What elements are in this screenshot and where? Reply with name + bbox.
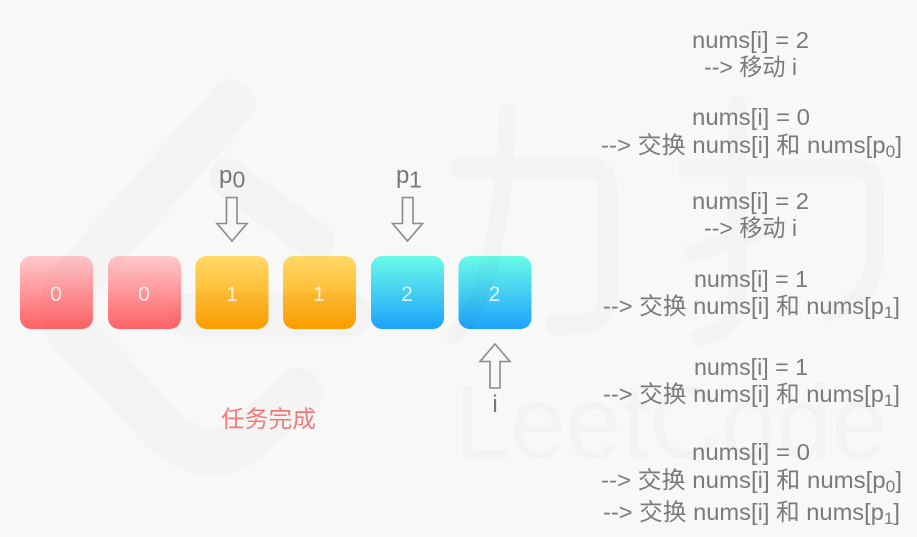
cell 4 [371, 256, 444, 329]
cell 4: 2 [401, 283, 413, 306]
step 4 text: --> 交换 nums[i] 和 nums[p [603, 293, 882, 319]
step 6 text: 0 [886, 477, 895, 496]
step 4 text: ] [893, 293, 900, 319]
step 6 text: ] [893, 499, 900, 525]
step 1 text: nums[i] = 2 [692, 27, 809, 53]
step 2 text: --> 交换 nums[i] 和 nums[p [601, 132, 880, 158]
cell 5: 2 [489, 283, 500, 306]
cell 3 [283, 256, 356, 329]
step 3 text [692, 188, 809, 241]
cell 5 [458, 256, 532, 329]
step 2 text: ] [895, 132, 902, 158]
step 6 text: 1 [884, 509, 893, 528]
step 4 text [603, 266, 900, 322]
cell 0: 0 [50, 283, 62, 306]
step 6 text: ] [895, 467, 902, 493]
step 4 text: nums[i] = 1 [694, 266, 808, 292]
pointer p0 label: p [219, 162, 232, 189]
step 3 text: --> 移动 i [704, 215, 797, 241]
pointer i label: i [492, 391, 498, 418]
step 2 text: nums[i] = 0 [692, 104, 810, 130]
step 3 text: nums[i] = 2 [692, 188, 809, 214]
pointer p1 label: 1 [409, 166, 422, 192]
step 2 text [601, 104, 902, 161]
status text: 任务完成 [221, 400, 316, 434]
step 1 text [692, 27, 809, 80]
step 6 text [601, 439, 902, 528]
cell 0 [20, 256, 93, 329]
step 5 text: --> 交换 nums[i] 和 nums[p [603, 381, 882, 407]
pointer p1 label: p [396, 162, 409, 189]
cell 1: 0 [138, 283, 150, 306]
array of coloured cells [20, 256, 532, 329]
pointer p0 label: 0 [232, 166, 245, 192]
arrow: p0 [217, 198, 247, 241]
step 4 text: 1 [884, 303, 893, 322]
step 1 text: --> 移动 i [704, 54, 797, 80]
cell 2: 1 [226, 283, 238, 306]
cell 2 [196, 256, 268, 329]
step 6 text: nums[i] = 0 [692, 439, 810, 465]
step 2 text: 0 [886, 142, 895, 161]
step 6 text: --> 交换 nums[i] 和 nums[p [601, 467, 880, 493]
step 6 text: --> 交换 nums[i] 和 nums[p [603, 499, 882, 525]
cell 1 [108, 256, 181, 329]
step 5 text: 1 [884, 391, 893, 410]
arrow: p1 [392, 198, 422, 241]
step 5 text [603, 354, 900, 410]
arrow: i [480, 344, 510, 388]
cell 3: 1 [313, 283, 325, 306]
step 5 text: nums[i] = 1 [694, 354, 808, 380]
step 5 text: ] [893, 381, 900, 407]
